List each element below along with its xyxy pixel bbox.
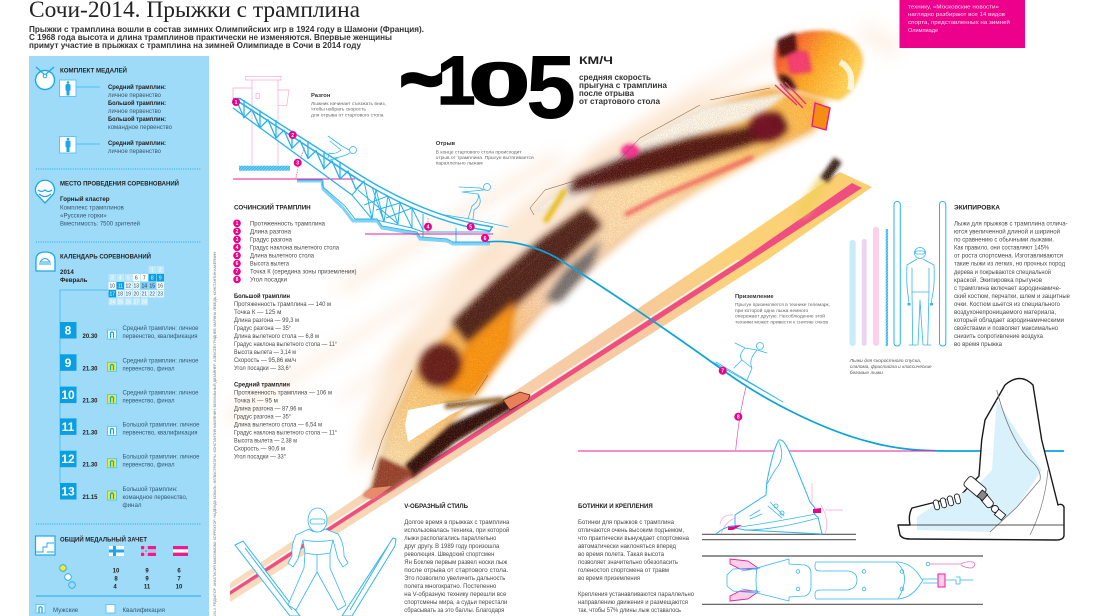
text: equipment: очки. Костюм шьется из специального [954,301,1061,308]
text: boots and bindings [578,503,695,614]
schedule day 12: 21.30 [82,463,98,469]
medal set section: личное первенство [108,148,162,155]
medal set section: Средний трамплин: [108,84,166,91]
large hill specs: Градус разгона — 35° [234,325,291,332]
legend: Мужские [53,607,79,614]
competition calendar section: 2014 [60,269,74,276]
schedule day 8: Средний трамплин: личное [122,325,199,332]
calendar numbers: 10 [110,284,115,290]
text: boots and bindings: что практически вынуждает спортсмена [578,535,690,542]
speed caption [579,55,667,106]
schedule day 9: Средний трамплин: личное [122,357,199,364]
big number: 5 [526,38,576,138]
boot white window [405,398,485,442]
text: equipment: краской. Экипировка прыгунов [954,277,1043,284]
calendar numbers: 3 [111,276,114,282]
large hill specs: Скорость — 95,86 км/ч [234,357,296,364]
calendar numbers: 27 [134,300,139,306]
note: landing: Приземление [735,294,774,300]
calendar numbers: 19 [126,292,131,298]
medal table section: 9 [145,576,149,582]
medal table section: 7 [177,576,181,582]
venue section: Комплекс трамплинов [60,204,125,212]
medium hill specs: Скорость — 90,6 м [234,446,285,453]
medal table section: 4 [113,584,117,590]
numbered list: Точка К (середина зоны приземления) [250,269,356,276]
schedule day 10: 10 [61,388,75,402]
numbered list: 4 [236,245,239,251]
large boot [898,378,1064,540]
medal table section [36,534,188,590]
small boot side view [702,440,856,540]
intro text: С 1968 года высота и длина трамплинов практически не изменяются. Впервые женщины [29,32,392,42]
pink callout: технику, «Московские новости» [908,4,999,10]
schedule day 11: 11 [62,420,75,434]
helmet [775,31,863,100]
flag: Norway [141,546,156,556]
venue section [36,178,179,228]
calendar numbers: 7 [143,276,146,282]
calendar numbers [110,268,163,306]
ski tip [503,392,530,410]
medal set section [36,66,173,155]
text: boots and bindings: автоматически наклоняться вперед [578,543,676,550]
text: V-style [404,501,510,614]
schedule day 8: 20.30 [82,334,98,340]
text: equipment: ский костюм, перчатки, шлем и защитные [954,293,1071,300]
schedule day 13: 21.15 [82,495,98,501]
large hill specs: Точка К — 125 м [234,309,281,316]
text: equipment: ЭКИПИРОВКА [954,204,1000,212]
landing angle: 8 [737,414,740,420]
text: boots and bindings: во время полета. Такая высота [578,551,665,558]
speed caption: средняя скорость [579,72,651,82]
medium hill specs: Точка К — 95 м [234,398,278,405]
text: equipment: по сравнению с обычными лыжами. [954,237,1054,244]
V-style skier [235,508,396,616]
text: boots and bindings: Крепления устанавливаются параллельно [578,591,695,598]
schedule day 12: первенство, финал [122,462,175,469]
ski caption: слалома, фристайла и классические [850,363,932,370]
medium hill specs: Длина разгона — 87,96 м [234,406,302,413]
calendar numbers: 1 [151,268,154,274]
schedule day 11 [60,418,200,436]
note: takeoff: параллельно лыжам [436,162,483,167]
stepped foundation [297,181,490,244]
big number: 1 [437,42,475,119]
schedule day 10: первенство, финал [122,398,175,405]
schedule day 10: 21.30 [82,399,98,405]
calendar numbers: 14 [142,284,147,290]
text: V-style: использовалась техника, при которой [404,527,510,534]
medium hill specs: Длина вылетного стола — 6,54 м [234,422,322,429]
speed caption: КМ/Ч [579,55,613,67]
marker 1: 1 [235,100,238,106]
equipment skis [850,202,946,346]
note: inrun: чтобы набрать скорость [311,107,366,113]
text: equipment: от роста спортсмена. Изготавливаются [954,253,1063,260]
red side stripe [625,157,753,215]
marker 3 [294,159,302,167]
helmet dark strap [777,33,797,58]
medal table section: 6 [177,568,181,574]
schedule day 12: 12 [61,452,75,466]
pink callout: Олимпиаде [908,28,938,34]
schedule day 13: Большой трамплин: [122,486,178,493]
text: equipment [954,204,1071,348]
text: V-style: Долгое время в прыжках с трамплина [404,519,510,526]
schedule day 11: первенство, квалификация [122,429,198,436]
speed caption: после отрыва [579,88,634,98]
numbered list: 5 [236,253,239,259]
medal set section: личное первенство [108,92,162,99]
marker 7 [719,367,727,375]
text: equipment: воздухонепроницаемого материала, [954,309,1056,316]
intro text: Прыжки с трамплина вошли в состав зимних Олимпийских игр в 1924 году в Шамони (Франция). [29,24,424,34]
text: boots and bindings: так, чтобы 57% длины лыж оставалось [578,607,681,614]
calendar numbers: 5 [127,276,130,282]
big number: ~ [400,37,443,120]
diagonal stripes [230,172,872,602]
large hill specs: Угол посадки — 33,6° [234,365,291,372]
note: inrun: Лыжник начинает съезжать вниз, [311,101,386,107]
calendar numbers: 21 [142,292,147,298]
helmet pink panel [785,48,812,74]
text: boots and bindings: отличаются очень высоким подъемом, [578,527,684,534]
large hill specs: Большой трамплин [234,293,290,300]
february calendar grid [108,266,164,306]
text: V-style: друг другу. В 1989 году произошла [404,543,500,550]
medal table section: ОБЩИЙ МЕДАЛЬНЫЙ ЗАЧЕТ [60,534,147,544]
schedule day 12: Большой трамплин: личное [122,454,200,461]
text: equipment: во время прыжка [954,341,1003,348]
boot lower brown [363,457,415,497]
ski jump structure [232,76,508,244]
numbered list: 6 [236,261,239,267]
big number [400,37,576,138]
marker 2: 2 [291,133,294,139]
calendar numbers: 22 [150,292,155,298]
competition calendar section [36,252,200,509]
lower truss [352,181,423,232]
landing skier [713,342,783,402]
text: V-style: Ян Боклев первым развел носки лыж [404,559,508,566]
venue section: МЕСТО ПРОВЕДЕНИЯ СОРЕВНОВАНИЙ [60,178,179,188]
text: V-style: на V-образную технику перешли все [404,591,507,598]
medal icons [60,565,75,588]
medal set section: личное первенство [108,108,162,115]
competition calendar section: КАЛЕНДАРЬ СОРЕВНОВАНИЙ [60,252,151,260]
text: equipment: с трамплина включает аэродинамиче- [954,285,1061,292]
panel: left sidebar [29,56,209,616]
schedule day 13: 13 [61,484,75,498]
numbered list: Длина разгона [250,228,292,236]
schedule day 8: 8 [65,324,72,338]
medium hill specs: Угол посадки — 33° [234,454,286,461]
text: boots and bindings: голеностоп спортсмена от травм [578,567,669,574]
medium hill specs: Средний трамплин [234,382,290,388]
text: V-style: лыжи располагались параллельно [404,535,497,542]
dark red hip blob [750,113,784,141]
large hill specs: Градус наклона вылетного стола — 11° [234,341,337,348]
numbered list: 2 [236,229,239,235]
schedule day 10: Средний трамплин: личное [122,390,199,397]
text: V-style: спортсмены мира, а судьи перестали [404,599,508,606]
note: landing: при которой одна лыжа немного [735,307,809,314]
binding top view [702,556,983,604]
text: V-style: Это позволило увеличить дальность [404,575,505,582]
marker 3: 3 [296,160,299,166]
numbered list: 3 [236,237,239,243]
marker 6: 6 [484,236,487,242]
yellow wrist accent [545,190,565,222]
dark arm band [568,112,788,193]
calendar numbers: 24 [110,300,115,306]
numbered list: Высота вылета [250,261,289,268]
calendar numbers: 15 [150,284,155,290]
flag: Finland [109,546,124,556]
note: takeoff [436,141,534,167]
marker 1 [232,98,240,106]
inrun rails [233,98,493,227]
marker 4 [424,223,432,231]
note: takeoff: Отрыв [436,141,456,147]
text: equipment: Лыжи для прыжков с трамплина отлича- [954,220,1068,228]
equipment athlete [907,248,934,345]
text: equipment: который обладает аэродинамическими [954,317,1065,324]
judges tower [233,76,289,165]
schedule day 8 [60,322,199,340]
calendar numbers: 18 [118,292,123,298]
note: landing: техники может привести к снятию очков [735,320,828,325]
schedule day 13: финал [122,502,142,509]
calendar numbers: 2 [159,268,162,274]
note: inrun: Разгон [311,93,331,99]
helmet highlight [840,62,851,90]
orange calf [440,300,515,395]
calendar numbers: 23 [158,292,163,298]
medal table section: 8 [114,576,118,582]
rear ski tail [800,160,838,215]
skier at takeoff [445,184,508,227]
body base [368,88,826,497]
credits vertical text: 2014. РЕДАКТОР: АНАСТАСИЯ МАКСИМОВА; КОРРЕКТОР: НАДЕЖДА КОВАЛЬ; ИЛЛЮСТРАТОРЫ: КОНСТАНТИН КАКЕЯНИН; ВИЗУАЛЬНЫЙ ДИЗАЙНЕР: АЛЕКСЕЙ ГРИДНЕВ, МАРИНА ЛЕБЕДЬ, КОНСТАНТИН КАКЕЯНИН [213,252,217,616]
large hill specs: Длина разгона — 99,3 м [234,317,299,324]
calendar numbers: 8 [151,276,154,282]
text: V-style: революция. Шведский спортсмен [404,551,494,558]
medal set section: Большой трамплин: [108,116,166,123]
pale arm [530,92,790,212]
sketch lines [372,88,770,470]
marker 2 [289,131,297,139]
schedule day 9: первенство, финал [122,365,175,372]
ski caption [849,358,932,376]
note: takeoff: В конце стартового стола происходит [436,149,522,155]
intro text: примут участие в прыжках с трамплина на зимней Олимпиаде в Сочи в 2014 году [29,40,361,50]
marker 7: 7 [721,368,724,374]
dark red calf [411,335,469,395]
schedule day 13: командное первенство, [122,494,188,501]
medium hill specs [234,382,337,461]
venue section: Вместимость: 7500 зрителей [60,220,141,228]
schedule day 9 [60,354,199,372]
text: boots and bindings: БОТИНКИ И КРЕПЛЕНИЯ [578,503,653,510]
landing angle [734,387,746,450]
medal set section: Средний трамплин: [108,140,166,147]
medium hill specs: Протяженность трамплина — 106 м [234,390,332,397]
text: boots and bindings: во время приземления [578,575,640,582]
calendar numbers: 16 [158,284,163,290]
pink callout [900,0,1025,48]
boot dark sole [405,396,516,478]
medal set section: Большой трамплин: [108,100,166,107]
text: equipment: ются увеличенной длиной и шириной [954,228,1061,236]
note: inrun [311,93,386,118]
schedule day 9: 9 [65,356,72,370]
text: equipment: свойствами и позволяет максимально [954,325,1059,332]
medal table section: 9 [145,568,149,574]
schedule day 12 [60,451,200,469]
numbered list: Длина вылетного стола [250,253,315,260]
speed caption: прыгуна с трамплина [579,80,667,90]
legend: Sochi ski jump: СОЧИНСКИЙ ТРАМПЛИН [234,202,311,211]
numbered list: 1 [236,221,239,227]
calendar numbers: 25 [118,300,123,306]
calendar numbers: 4 [119,276,122,282]
calendar numbers: 17 [110,292,115,298]
numbered list: Угол посадки [250,277,288,284]
ground line [578,450,935,452]
motion trails [225,30,900,420]
schedule day 11: Большой трамплин: личное [122,421,200,428]
numbered list: Градус наклона вылетного стола [250,244,340,252]
medium hill specs: Градус наклона вылетного стола — 11° [234,430,337,437]
marker 6 [481,234,489,242]
landing slope curve [487,241,1064,451]
note: landing: Прыгун приземляется в технике телемарк, [735,302,830,308]
text: boots and bindings: позволяет значительно обезопасить [578,559,678,566]
legend: Sochi ski jump [233,202,356,461]
medium hill specs: Высота вылета — 2,38 м [234,438,297,445]
numbered list [233,220,356,284]
grey shin stripe [545,240,602,302]
collar [812,103,830,130]
boot upper stripes [445,397,503,409]
calendar numbers: 11 [118,284,123,290]
note: landing [735,294,830,325]
calendar numbers: 28 [142,300,147,306]
upper truss [233,99,364,195]
marker 4: 4 [427,224,430,230]
text: equipment: снизить сопротивление воздуха [954,333,1044,340]
schedule day 13 [60,483,188,509]
intro text [29,24,424,50]
venue section: «Русские горки» [60,212,107,220]
competition calendar section: Февраль [60,277,88,284]
dark leg [452,208,602,345]
numbered list: 7 [236,269,239,275]
medal set section: КОМПЛЕКТ МЕДАЛЕЙ [60,66,127,74]
legend: Квалификация [122,607,165,614]
skier on inrun [328,136,356,160]
numbered list: 8 [236,277,239,283]
flag: Austria [173,546,188,556]
jumper illustration [225,30,900,500]
boot buckles [933,475,1006,520]
medal set section: командное первенство [108,124,173,131]
large hill specs: Протяженность трамплина — 140 м [234,301,331,308]
large hill specs [234,293,337,372]
medium hill specs: Градус разгона — 35° [234,414,291,421]
calendar numbers: 20 [134,292,139,298]
note: takeoff: отрыв от трамплина. Прыгун вытягивается [436,155,534,161]
body halo [355,85,790,470]
text: V-style: V-ОБРАЗНЫЙ СТИЛЬ [404,501,468,510]
text: boots and bindings: направлению движения и размещаются [578,599,688,606]
ski caption: Лыжи для скоростного спуска, [849,358,921,364]
medal table section: 10 [113,568,120,574]
schedule day 10 [60,387,199,405]
big number: 0 [468,51,530,118]
marker 5 [467,223,475,231]
marker 5: 5 [469,224,472,230]
legend [36,604,165,614]
speed caption: от стартового стола [579,96,660,106]
text: V-style: после отрыва от стартового стола. [404,567,509,574]
large hill specs: Длина вылетного стола — 6,8 м [234,333,319,340]
calendar numbers: 12 [126,284,131,290]
ski caption: беговые лыжи [850,370,883,376]
large hill specs: Высота вылета — 3,14 м [234,349,296,356]
note: inrun: для отрыва от стартового стола [311,114,384,118]
text: V-style: сбрасывать за это баллы. Благодаря [404,607,504,614]
calendar numbers: 26 [126,300,131,306]
numbered list: Протяженность трамплина [250,220,326,228]
text: equipment: такие лыжи из легких, но прочных пород [954,261,1065,268]
medal table section: 11 [144,584,151,590]
calendar numbers: 6 [135,276,138,282]
schedule day 9: 21.30 [82,366,98,372]
note: landing: опережает другую. Несоблюдение этой [735,312,825,320]
pink knee patch [621,144,639,158]
calendar numbers: 9 [159,276,162,282]
shoulder stripes [775,82,806,108]
pink callout: наглядно разбирают все 14 видов [908,12,1005,18]
venue section: Горный кластер [60,196,110,203]
medal table section: 10 [176,584,183,590]
text: equipment: дерева и покрываются специальной [954,269,1051,276]
pink callout: спорта, представленных на зимней [908,19,1010,26]
text: equipment: Как правило, они составляют 145% [954,245,1049,252]
schedule day 8: первенство, квалификация [122,333,198,340]
calendar numbers: 13 [134,284,139,290]
text: V-style: полета многократно. Постепенно [404,583,497,590]
text: boots and bindings: Ботинки для прыжков с трамплина [578,519,675,526]
numbered list: Градус разгона [250,236,293,244]
schedule day 11: 21.30 [82,430,98,436]
